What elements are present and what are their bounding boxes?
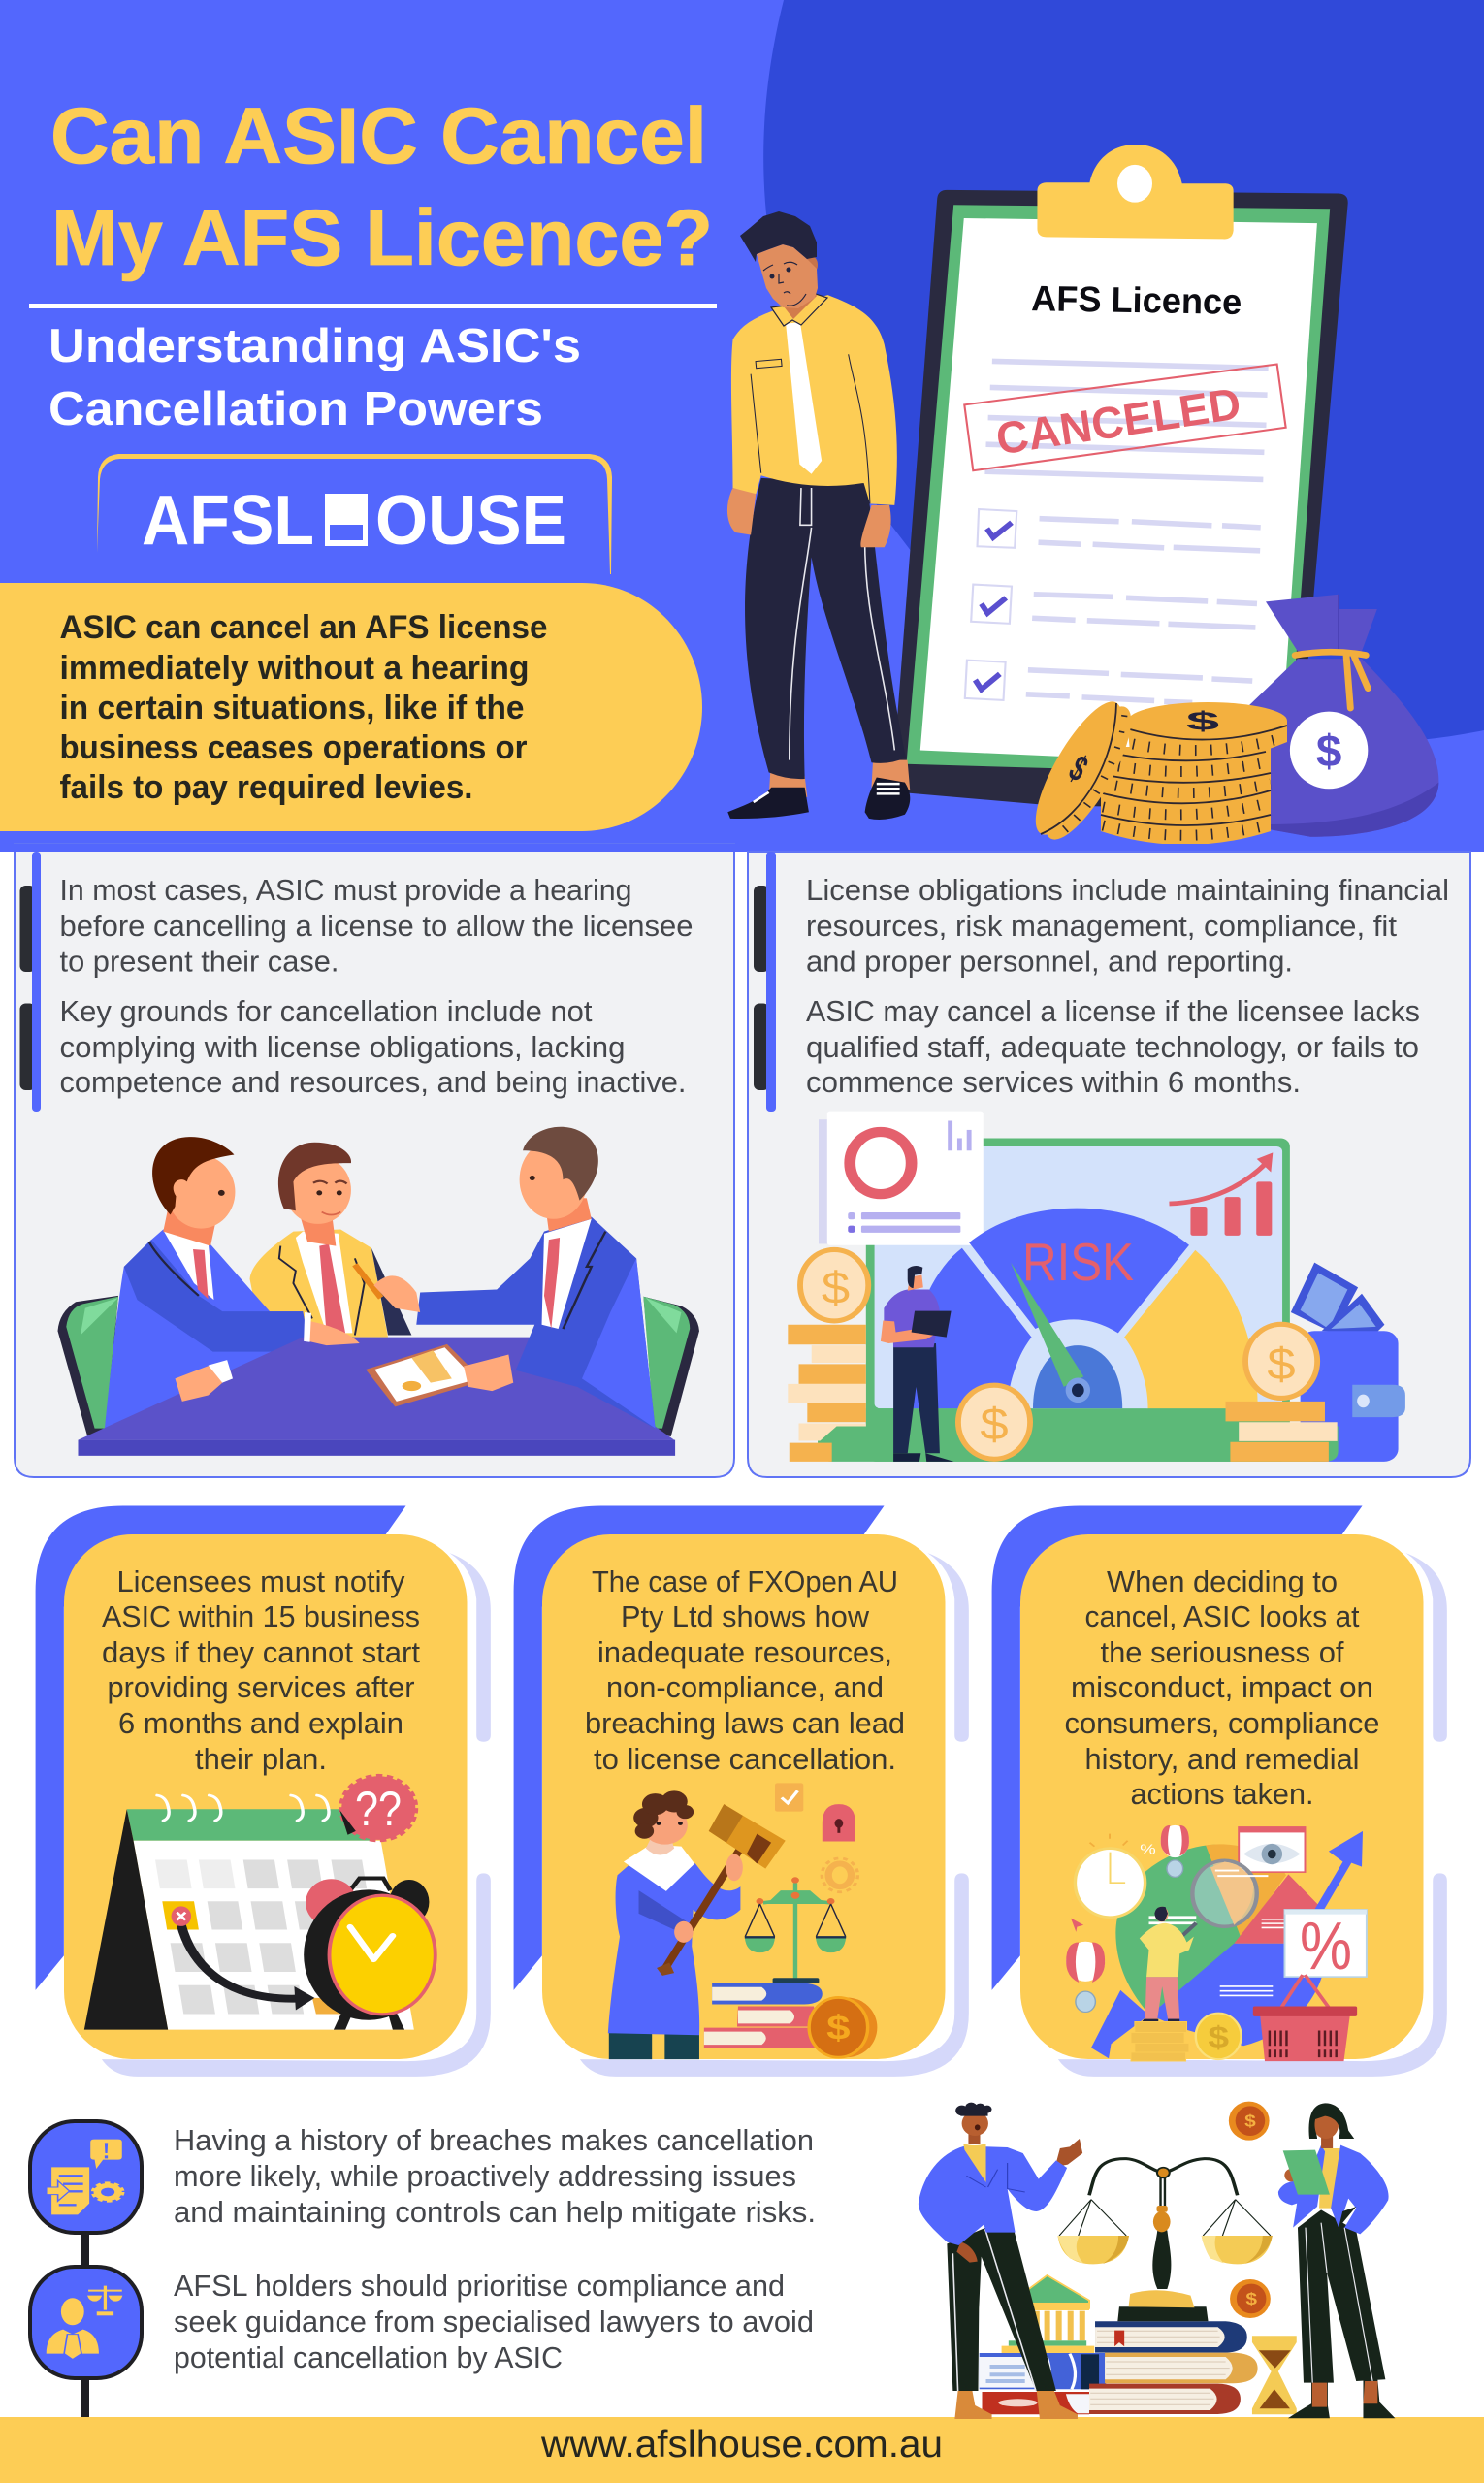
panel: hearing and grounds — [0, 844, 1484, 1477]
card text: providing services after — [107, 1670, 415, 1704]
card text: history, and remedial — [1084, 1742, 1360, 1776]
subtitle: Understanding ASIC's — [48, 320, 581, 372]
main title: Can ASIC Cancel — [50, 92, 707, 180]
illustration: risk gauge dashboard: $ — [822, 1264, 850, 1313]
text: history of breaches: and maintaining controls can help mitigate risks. — [174, 2195, 816, 2229]
text: history of breaches: Having a history of breaches makes cancellation — [174, 2123, 814, 2157]
panel text: complying with license obligations, lacking — [60, 1030, 625, 1064]
panel text: qualified staff, adequate technology, or fails to — [806, 1030, 1419, 1064]
subtitle: Cancellation Powers — [48, 383, 543, 435]
worried man in yellow shirt — [727, 211, 910, 820]
illustration: analyst with magnifier, chart and basket: $ — [1208, 2020, 1229, 2054]
panel text: resources, risk management, compliance, fit — [806, 909, 1397, 943]
card text: actions taken. — [1131, 1777, 1313, 1811]
card: FXOpen AU case — [514, 1506, 969, 2077]
panel text: In most cases, ASIC must provide a hearing — [60, 873, 632, 907]
illustration: risk gauge dashboard — [788, 1112, 1405, 1462]
illustration: judge with gavel, scales and books — [608, 1783, 877, 2059]
panel: obligations and risk — [748, 852, 1470, 1477]
card text: the seriousness of — [1100, 1635, 1344, 1669]
panel text: to present their case. — [60, 945, 339, 978]
yellow callout: immediate cancellation: ASIC can cancel an AFS license — [60, 609, 547, 646]
text: prioritise compliance: potential cancellation by ASIC — [174, 2340, 563, 2374]
text: history of breaches: more likely, while proactively addressing issues — [174, 2159, 796, 2193]
card text: Pty Ltd shows how — [621, 1599, 870, 1633]
text: prioritise compliance: seek guidance from specialised lawyers to avoid — [174, 2305, 814, 2338]
logo: AFSL House — [97, 454, 612, 574]
money bag — [1243, 595, 1438, 837]
illustration: advisers with scales of justice and law books: $ — [1245, 2291, 1257, 2308]
footer band: www.afslhouse.com.au — [540, 2424, 943, 2466]
card text: Licensees must notify — [116, 1564, 405, 1598]
text: history of breaches — [174, 2123, 816, 2229]
card text: cancel, ASIC looks at — [1084, 1599, 1360, 1633]
illustration: business meeting — [58, 1127, 699, 1456]
percent sign: % — [1300, 1908, 1352, 1983]
panel text: License obligations include maintaining financial — [806, 873, 1449, 907]
logo: AFSL House: AFSL — [142, 482, 314, 560]
card text: ASIC within 15 business — [102, 1599, 420, 1633]
illustration: judge with gavel, scales and books: $ — [826, 2009, 851, 2048]
card text: When deciding to — [1107, 1564, 1338, 1598]
illustration: analyst with magnifier, chart and basket: % — [1140, 1841, 1156, 1857]
main title — [50, 92, 713, 282]
clipboard: AFS Licence canceled — [892, 145, 1348, 810]
card text: breaching laws can lead — [585, 1706, 905, 1740]
badge question marks: ?? — [355, 1782, 402, 1836]
card text: days if they cannot start — [102, 1635, 420, 1669]
footer band — [0, 2417, 1484, 2483]
illustration: calendar and alarm clock — [84, 1776, 436, 2030]
panel text: commence services within 6 months. — [806, 1065, 1301, 1099]
text: prioritise compliance: AFSL holders should prioritise compliance and — [174, 2269, 785, 2303]
card text: misconduct, impact on — [1071, 1670, 1373, 1704]
hero header background — [0, 0, 1484, 852]
timeline connector — [81, 2231, 89, 2417]
text: prioritise compliance — [174, 2269, 814, 2374]
main title: My AFS Licence? — [51, 194, 713, 282]
card text — [102, 1564, 420, 1776]
subtitle — [48, 320, 581, 435]
yellow callout: immediate cancellation: business ceases operations or — [60, 729, 528, 766]
card text: their plan. — [195, 1742, 327, 1776]
illustration: analyst with magnifier, chart and basket — [1066, 1825, 1367, 2061]
card text: The case of FXOpen AU — [592, 1564, 898, 1598]
card: notify ASIC within 15 business days — [36, 1506, 491, 2077]
gold coin stack — [1020, 691, 1287, 851]
panel text: competence and resources, and being inactive. — [60, 1065, 687, 1099]
yellow callout: immediate cancellation: fails to pay required levies. — [60, 769, 473, 806]
card text: inadequate resources, — [597, 1635, 892, 1669]
panel text — [806, 873, 1449, 1099]
panel text: Key grounds for cancellation include not — [60, 994, 593, 1028]
card text: consumers, compliance — [1065, 1706, 1379, 1740]
yellow callout: immediate cancellation — [0, 583, 702, 831]
illustration: advisers with scales of justice and law books — [919, 2102, 1395, 2419]
yellow callout: immediate cancellation: immediately without a hearing — [60, 650, 530, 687]
money bag: $ — [1316, 726, 1341, 776]
panel text: and proper personnel, and reporting. — [806, 945, 1293, 978]
gold coin stack: $ — [1062, 747, 1095, 790]
logo: AFSL House: OUSE — [375, 482, 566, 560]
icon: document, alert and gear — [30, 2121, 142, 2233]
man's head — [740, 211, 827, 326]
panel text: before cancelling a license to allow the licensee — [60, 909, 693, 943]
illustration: advisers with scales of justice and law books: $ — [1244, 2112, 1256, 2131]
panel text — [60, 873, 693, 1099]
gauge label: RISK — [1022, 1232, 1134, 1292]
card: how ASIC decides to cancel — [992, 1506, 1447, 2077]
clipboard heading: AFS Licence — [1031, 278, 1242, 322]
card text: to license cancellation. — [594, 1742, 896, 1776]
panel text: ASIC may cancel a license if the licensee lacks — [806, 994, 1420, 1028]
card text — [585, 1564, 905, 1776]
card text: 6 months and explain — [118, 1706, 403, 1740]
illustration: risk gauge dashboard: $ — [1267, 1339, 1296, 1389]
illustration: risk gauge dashboard: $ — [980, 1400, 1009, 1449]
icon: lawyer and scales — [30, 2267, 142, 2378]
card text: non-compliance, and — [606, 1670, 884, 1704]
canceled stamp: CANCELED — [993, 378, 1243, 464]
yellow callout: immediate cancellation: in certain situations, like if the — [60, 690, 524, 726]
gold coin stack: $ — [1186, 706, 1219, 736]
card text — [1065, 1564, 1379, 1811]
